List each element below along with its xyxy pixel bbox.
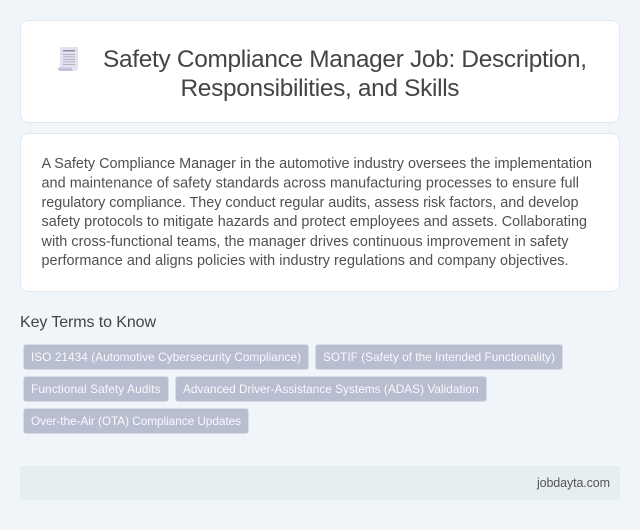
chip: OTA updates [24, 408, 248, 434]
description text: and maintenance of safety standards across manufacturing processes to ensure full [42, 176, 579, 192]
title: Responsibilities, and Skills [180, 75, 460, 102]
description text: regulatory compliance. They conduct regular audits, assess risk factors, and develop [42, 195, 578, 211]
chip: ISO 21434 [24, 344, 308, 370]
heading: key terms: Key Terms to Know [20, 314, 156, 331]
chip: ADAS validation [176, 376, 486, 402]
chip: ADAS validation: Advanced Driver-Assistance Systems (ADAS) Validation [183, 382, 478, 396]
chips: key terms [24, 344, 562, 434]
chip: functional safety audits: Functional Safety Audits [31, 382, 161, 396]
title [103, 46, 587, 102]
chip: OTA updates: Over-the-Air (OTA) Compliance Updates [31, 414, 241, 428]
footer: jobdayta.com [536, 476, 610, 490]
description text: A Safety Compliance Manager in the automotive industry oversees the implementation [42, 156, 592, 172]
panel: title card [20, 20, 620, 122]
icon: document scroll [58, 47, 78, 71]
description text: with cross-functional teams, the manager drives continuous improvement in safety [40, 234, 569, 250]
description text [40, 156, 592, 269]
title: Safety Compliance Manager Job: Description, [103, 46, 587, 73]
chip: SOTIF [316, 344, 562, 370]
description text: safety protocols to mitigate hazards and protect employees and assets. Collaborating [42, 214, 587, 230]
chip: ISO 21434: ISO 21434 (Automotive Cybersecurity Compliance) [31, 350, 301, 364]
chip: SOTIF: SOTIF (Safety of the Intended Functionality) [323, 350, 555, 364]
footer [20, 466, 620, 500]
chip: functional safety audits [24, 376, 168, 402]
panel: description card [20, 134, 620, 292]
description text: performance and aligns policies with industry regulations and company objectives. [42, 253, 568, 269]
